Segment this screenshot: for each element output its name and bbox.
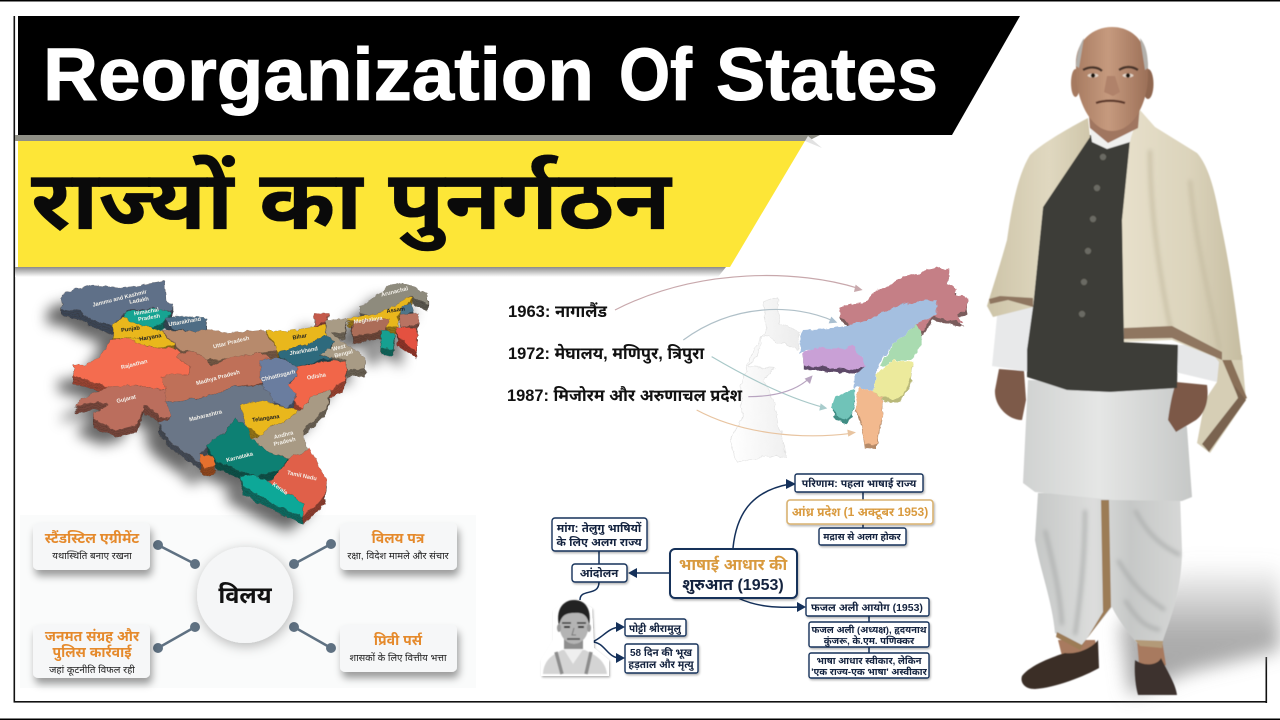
title banner: Hindi — [15, 141, 805, 277]
map state labels: Meghalaya — [353, 316, 384, 326]
members box: फजल अली (अध्यक्ष), हृदयनाथ — [811, 624, 927, 636]
card: plebiscite and police action: जहां कूटनीति विफल रही — [49, 664, 135, 676]
map state labels: Odisha — [306, 372, 327, 382]
map state labels: Madhya Pradesh — [196, 370, 241, 387]
map shadow — [47, 297, 413, 532]
outcome box: 'एक राज्य-एक भाषा' अस्वीकार — [811, 666, 928, 678]
card: instrument of accession — [340, 523, 457, 570]
connector: standstill — [153, 540, 200, 569]
hands — [995, 369, 1208, 432]
Bengal ghost outline — [730, 297, 800, 463]
card: privy purse: प्रिवी पर्स — [374, 632, 423, 648]
statehood timeline text: 1987: मिजोरम और अरुणाचल प्रदेश — [507, 386, 743, 405]
map state labels: Assam — [386, 306, 405, 315]
map extrusion — [62, 283, 428, 524]
title banner: Hindi: राज्यों का पुनर्गठन — [31, 154, 673, 251]
demand box — [552, 518, 647, 551]
arrow: purple — [748, 375, 813, 397]
map body — [62, 282, 428, 524]
fast box — [625, 644, 698, 673]
movement box: आंदोलन — [580, 567, 619, 580]
map state labels: Gujarat — [116, 394, 137, 405]
merger diagram: विलय — [33, 523, 457, 678]
map state labels: Himachal — [134, 307, 160, 317]
map state labels: Bengal — [334, 349, 354, 360]
north-east states map — [615, 267, 968, 463]
title banner: English: Reorganization — [43, 33, 594, 116]
card: plebiscite and police action — [33, 625, 150, 678]
arrow: rose — [615, 276, 863, 310]
title banner: English — [15, 16, 1020, 148]
statehood timeline text: 1963: नागालैंड — [508, 302, 607, 321]
map state labels: West — [332, 344, 346, 353]
connector: instrument of accession — [289, 539, 336, 569]
linguistic basis flowchart — [541, 474, 933, 678]
Meghalaya — [803, 347, 866, 370]
map state labels: Kerala — [271, 482, 289, 497]
Tripura — [832, 388, 855, 420]
statehood timeline text — [507, 302, 743, 405]
card: plebiscite and police action: पुलिस कार्रवाई — [52, 644, 133, 662]
Andhra Pradesh box — [787, 500, 933, 524]
result box — [795, 474, 923, 492]
map state labels: Uttar Pradesh — [213, 335, 251, 350]
arrow: teal — [712, 357, 827, 411]
dhoti — [1035, 493, 1182, 650]
Nagaland — [880, 325, 922, 367]
background behind merger diagram — [20, 515, 476, 688]
arrow: orange — [697, 410, 856, 437]
fast box: हड़ताल और मृत्यु — [628, 659, 695, 671]
statehood timeline text: 1972: मेघालय, मणिपुर, त्रिपुरा — [508, 344, 705, 364]
main node: भाषाई आधार की — [679, 555, 787, 574]
demand box: के लिए अलग राज्य — [556, 535, 642, 549]
Mizoram — [856, 387, 883, 445]
NE extrusion — [803, 271, 968, 449]
map state labels: Bihar — [292, 333, 308, 342]
flow connectors — [580, 479, 869, 663]
NE map body — [800, 267, 968, 449]
map state labels: Telangana — [252, 414, 281, 424]
Arunachal Pradesh — [840, 267, 968, 332]
title banner: English: States — [716, 33, 938, 116]
vest buttons — [1079, 154, 1106, 317]
connector: plebiscite — [153, 622, 200, 653]
members box: कुंजरू, के.एम. पणिक्कर — [824, 634, 915, 647]
outcome box — [809, 653, 929, 678]
map state labels: Haryana — [139, 333, 163, 343]
main node: शुरुआत (1953) — [682, 577, 784, 595]
outcome box: भाषा आधार स्वीकार, लेकिन — [817, 654, 922, 667]
portrait figure: Sardar Patel — [987, 27, 1280, 695]
India 3D map — [47, 282, 428, 532]
Andhra Pradesh box: आंध्र प्रदेश (1 अक्टूबर 1953) — [792, 504, 928, 520]
demand box: मांग: तेलुगु भाषियों — [557, 521, 642, 536]
title banner: English: Of — [619, 33, 692, 116]
card: standstill agreement: यथास्थिति बनाए रखना — [52, 550, 132, 562]
shawl drape behind right hand — [1197, 345, 1247, 453]
map state labels: Rajasthan — [121, 359, 149, 371]
map state labels: Jharkhand — [289, 346, 319, 357]
card: plebiscite and police action: जनमत संग्रह और — [45, 628, 140, 644]
kurta — [1023, 380, 1192, 501]
card: standstill agreement — [33, 523, 150, 570]
Fazal Ali box — [806, 598, 929, 616]
central circle: विलय — [218, 581, 273, 608]
connector: privy purse — [289, 622, 336, 653]
head — [1071, 27, 1154, 143]
map state labels: Pradesh — [138, 313, 161, 323]
state shapes — [62, 282, 428, 517]
main node — [670, 549, 797, 598]
Manipur — [873, 360, 913, 400]
vest — [1027, 135, 1178, 392]
members box — [809, 622, 929, 647]
movement box — [572, 564, 627, 582]
shawl — [987, 110, 1242, 360]
map state labels: Punjab — [121, 325, 141, 334]
arrow: blue — [683, 309, 837, 340]
collar — [1090, 128, 1133, 149]
floor shadow — [1120, 560, 1280, 695]
card: instrument of accession: विलय पत्र — [372, 530, 425, 546]
Potti box — [625, 619, 686, 636]
card: standstill agreement: स्टैंडस्टिल एग्रीमेंट — [45, 530, 139, 547]
map state labels: Ladakh — [129, 296, 150, 306]
map state labels: Jammu and Kashmir — [92, 289, 148, 309]
portrait: Potti Sreeramulu — [541, 598, 609, 676]
map state labels: Pradesh — [273, 437, 297, 448]
Potti box: पोट्टी श्रीरामुलु — [629, 623, 682, 635]
map state labels: Maharashtra — [189, 409, 224, 423]
map state labels: Chhattisgarh — [261, 369, 297, 383]
map state labels: Tamil Nadu — [287, 470, 318, 483]
central circle — [197, 547, 293, 643]
Assam — [800, 300, 937, 392]
Madras box: मद्रास से अलग होकर — [823, 530, 902, 543]
result box: परिणाम: पहला भाषाई राज्य — [802, 477, 917, 490]
feet and shoes — [1022, 640, 1177, 695]
card: privy purse — [340, 625, 457, 672]
card: instrument of accession: रक्षा, विदेश मामले और संचार — [347, 550, 450, 562]
card: privy purse: शासकों के लिए वित्तीय भत्ता — [350, 652, 447, 664]
map state labels: Arunachal — [381, 286, 409, 299]
map state labels: Uttarakhand — [168, 316, 202, 328]
map state labels: Andhra — [273, 430, 295, 441]
sleeves — [992, 307, 1219, 382]
Fazal Ali box: फजल अली आयोग (1953) — [811, 601, 923, 614]
Madras box — [819, 528, 906, 545]
map state labels: Karnataka — [226, 451, 255, 464]
fast box: 58 दिन की भूख — [630, 647, 692, 659]
map state labels — [92, 286, 409, 497]
